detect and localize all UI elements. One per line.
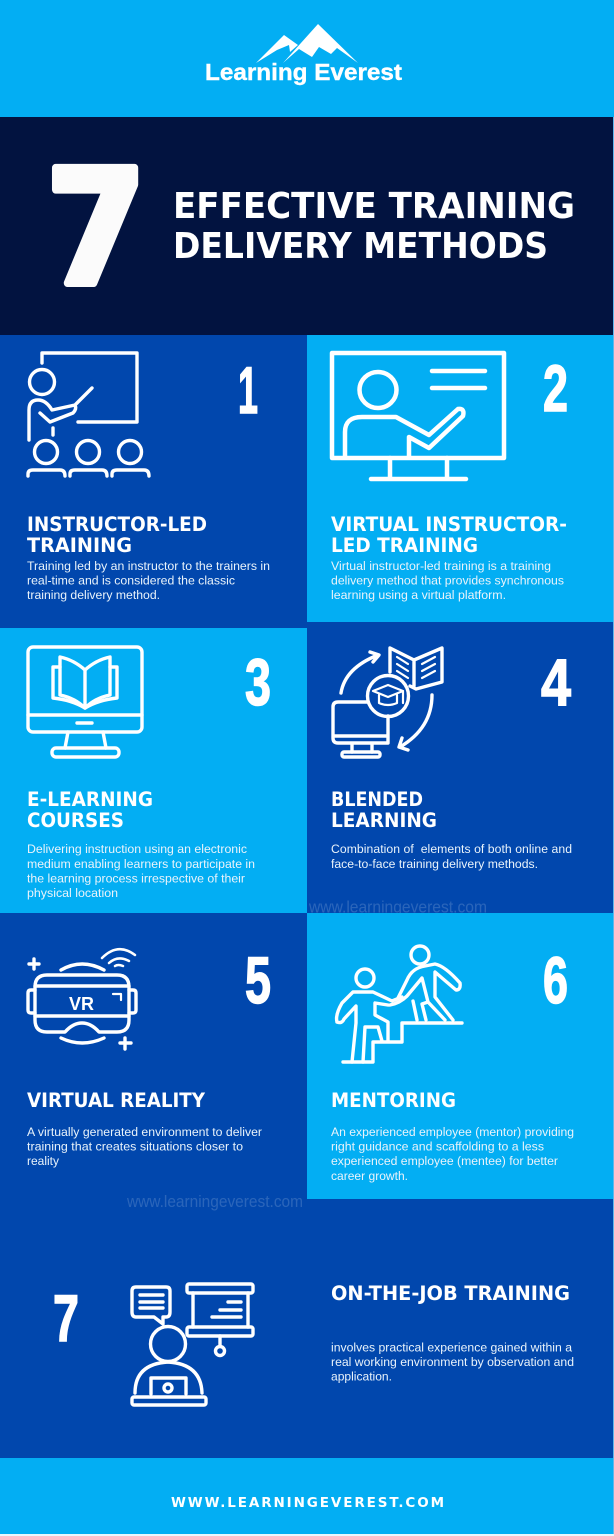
big number seven: 7 [46, 137, 146, 321]
description: A virtually generated environment to deliver [27, 1125, 262, 1139]
heading [27, 788, 153, 832]
description: An experienced employee (mentor) providing [331, 1125, 574, 1139]
description: real working environment by observation and [331, 1355, 574, 1369]
heading: VIRTUAL REALITY [27, 1089, 206, 1112]
website address: WWW.LEARNINGEVEREST.COM [171, 1495, 444, 1511]
description: physical location [27, 886, 118, 900]
description: the learning process irrespective of their [27, 872, 245, 886]
icon: learner with laptop and presentation board [132, 1284, 253, 1405]
heading: VIRTUAL INSTRUCTOR- [331, 513, 567, 536]
title panel [0, 117, 614, 335]
description: Virtual instructor-led training is a training [331, 559, 551, 573]
description: reality [27, 1154, 60, 1168]
logo: Learning Everest [205, 59, 402, 85]
heading: INSTRUCTOR-LED [27, 513, 207, 536]
description [331, 1340, 574, 1384]
icon: monitor with presenter [332, 353, 504, 479]
description: real-time and is considered the classic [27, 574, 235, 588]
number 3: 3 [245, 645, 271, 719]
description: Training led by an instructor to the trainers in [27, 559, 270, 573]
description: application. [331, 1370, 392, 1384]
description [331, 1125, 574, 1183]
description [27, 842, 255, 900]
panel: instructor-led training [0, 335, 307, 628]
description: experienced employee (mentee) for better [331, 1154, 558, 1168]
number 2: 2 [543, 351, 568, 425]
title text: DELIVERY METHODS [173, 226, 548, 267]
description: career growth. [331, 1169, 408, 1183]
panel: e-learning courses [0, 628, 307, 913]
panel: virtual reality [0, 913, 307, 1199]
heading: TRAINING [27, 534, 132, 557]
heading [331, 513, 567, 557]
description: face-to-face training delivery methods. [331, 857, 538, 871]
description: medium enabling learners to participate in [27, 857, 255, 871]
heading: ON-THE-JOB TRAINING [331, 1282, 570, 1305]
number 6: 6 [543, 943, 568, 1017]
icon: VR headset [28, 949, 136, 1049]
description: Combination of elements of both online and [331, 842, 572, 856]
title text [173, 186, 575, 267]
title text: EFFECTIVE TRAINING [173, 186, 575, 227]
description: right guidance and scaffolding to a less [331, 1140, 544, 1154]
watermark: www.learningeverest.com [308, 898, 487, 916]
icon: blended learning cycle [333, 648, 442, 757]
panel: virtual instructor-led training [307, 335, 614, 622]
description: involves practical experience gained within a [331, 1340, 572, 1354]
icon: mentor helping mentee up stairs [337, 946, 462, 1062]
panel: mentoring [307, 913, 614, 1199]
heading [331, 788, 437, 832]
description: training delivery method. [27, 588, 160, 602]
heading: COURSES [27, 809, 124, 832]
heading [27, 513, 207, 557]
icon: computer with book [28, 647, 142, 757]
description: training that creates situations closer to [27, 1140, 243, 1154]
heading: E-LEARNING [27, 788, 153, 811]
description: Delivering instruction using an electronic [27, 842, 247, 856]
number 4: 4 [541, 645, 571, 719]
heading: BLENDED [331, 788, 423, 811]
number 1: 1 [238, 353, 258, 427]
description [331, 842, 572, 871]
panel: blended learning [307, 622, 614, 916]
footer band [0, 1458, 614, 1534]
number 7: 7 [53, 1281, 79, 1355]
description [27, 559, 270, 602]
number 5: 5 [245, 943, 271, 1017]
description: delivery method that provides synchronous [331, 574, 564, 588]
icon: instructor with students [28, 353, 149, 476]
watermark: www.learningeverest.com [126, 1193, 303, 1211]
description: learning using a virtual platform. [331, 588, 506, 602]
description [331, 559, 564, 602]
heading: MENTORING [331, 1089, 456, 1112]
header band [0, 0, 614, 117]
heading: LEARNING [331, 809, 437, 832]
heading: LED TRAINING [331, 534, 478, 557]
logo [205, 24, 402, 85]
panel: on-the-job training [0, 1199, 614, 1458]
icon: VR headset: VR [69, 994, 94, 1014]
description [27, 1125, 262, 1168]
